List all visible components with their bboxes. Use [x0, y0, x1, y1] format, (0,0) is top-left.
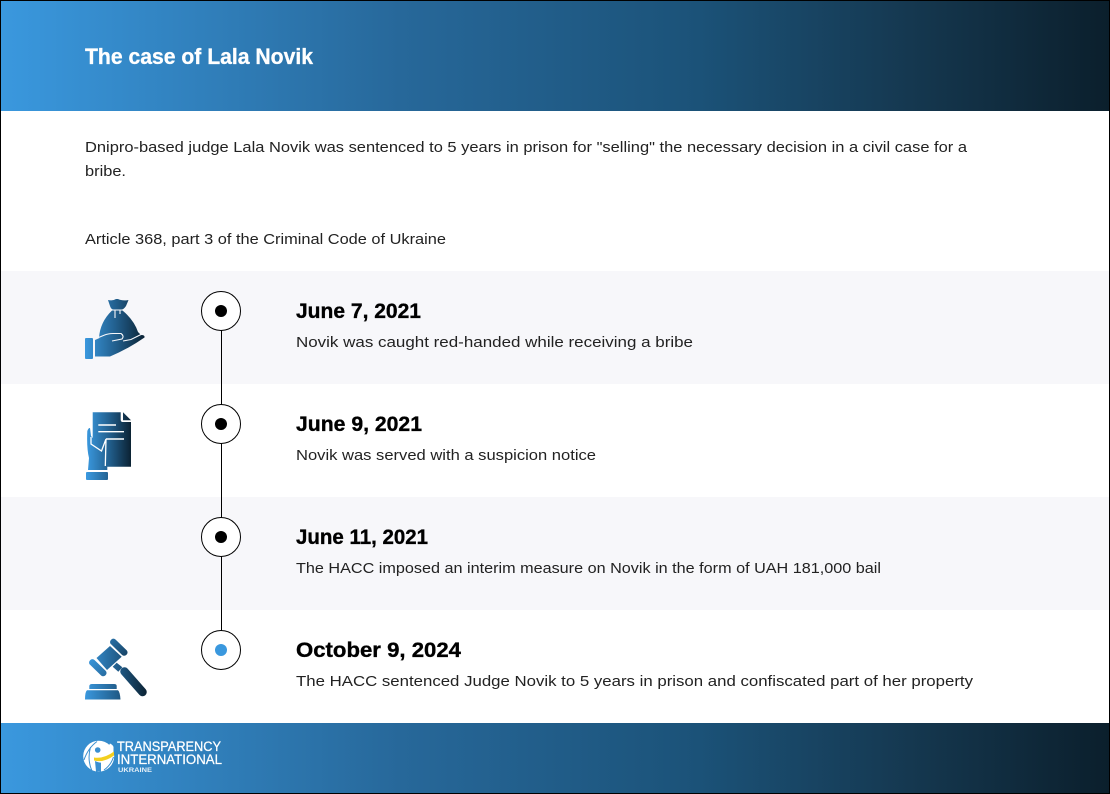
title: The case of Lala Novik: [85, 44, 314, 69]
event: June 9, 2021: Novik was served with a suspicion notice: [296, 447, 596, 464]
event: June 7, 2021: Novik was caught red-handed while receiving a bribe: [296, 334, 693, 351]
intro text: [85, 139, 968, 180]
logo: Transparency International Ukraine: INTERNATIONAL: [117, 752, 222, 767]
event: October 9, 2024: [296, 639, 974, 690]
event: June 11, 2021: [296, 526, 881, 577]
event: June 7, 2021: [296, 300, 693, 351]
footer banner: [1, 723, 1109, 793]
timeline: [202, 292, 240, 670]
intro text: Dnipro-based judge Lala Novik was sentenced to 5 years in prison for "selling" the necessary decision in a civil case for a: [85, 139, 968, 156]
event: June 7, 2021: June 7, 2021: [296, 300, 421, 323]
logo: Transparency International Ukraine: TRANSPARENCY: [117, 739, 221, 754]
logo: Transparency International Ukraine: UKRAINE: [118, 767, 153, 774]
timeline marker: June 7: [202, 292, 240, 330]
logo: Transparency International Ukraine: [83, 739, 222, 774]
timeline marker: June 9: [202, 404, 240, 444]
header banner: [1, 1, 1109, 111]
icon: hand holding document: [86, 412, 131, 480]
event: June 9, 2021: June 9, 2021: [296, 413, 422, 436]
event: October 9, 2024: October 9, 2024: [296, 639, 461, 662]
intro text: bribe.: [85, 163, 126, 180]
event: June 11, 2021: The HACC imposed an interim measure on Novik in the form of UAH 181,000 bail: [296, 560, 881, 577]
icon: money bag in hand: [85, 299, 145, 359]
event: June 9, 2021: [296, 413, 596, 464]
event: June 11, 2021: June 11, 2021: [296, 526, 428, 549]
icon: judge gavel: [85, 637, 144, 700]
row backgrounds: [1, 271, 1109, 610]
timeline marker: October 9: [202, 630, 240, 670]
timeline marker: June 11: [202, 518, 240, 556]
event: October 9, 2024: The HACC sentenced Judge Novik to 5 years in prison and confiscated part of her property: [296, 673, 974, 690]
legal article reference: Article 368, part 3 of the Criminal Code of Ukraine: [85, 231, 446, 248]
